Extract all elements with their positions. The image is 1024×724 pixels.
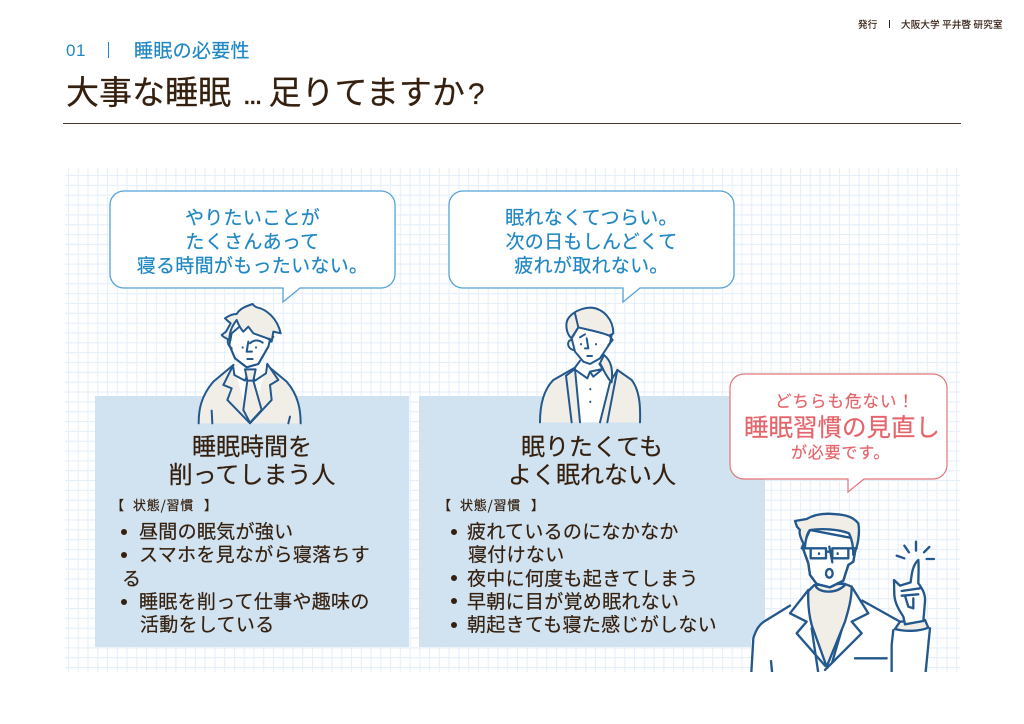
bullet bbox=[121, 529, 127, 535]
title: 大事な睡眠 ...足りてますか? bbox=[66, 66, 485, 114]
middle card label open bracket: 【 bbox=[438, 495, 452, 514]
middle card heading bbox=[508, 427, 676, 490]
list item wrap: 寝付けない bbox=[468, 540, 565, 567]
panel: left blue card bbox=[95, 396, 409, 647]
icon: professor pointing bbox=[751, 514, 934, 678]
publisher: laboratory: 大阪大学 平井啓 研究室 bbox=[901, 17, 1003, 31]
bubble: right bbox=[730, 374, 947, 492]
list item wrap: る bbox=[122, 564, 141, 591]
left card list bbox=[121, 517, 370, 637]
list item: 睡眠を削って仕事や趣味の bbox=[139, 587, 370, 614]
section number: 01 bbox=[66, 41, 86, 60]
list item: 夜中に何度も起きてしまう bbox=[467, 564, 699, 591]
left card label close bracket: 】 bbox=[204, 495, 218, 514]
list item: 早朝に目が覚め眠れない bbox=[467, 587, 679, 614]
icon: man with tie bbox=[199, 304, 301, 423]
bullet bbox=[121, 599, 127, 605]
right bubble heading: 睡眠習慣の見直し bbox=[744, 409, 940, 444]
panel: middle blue card bbox=[419, 396, 765, 647]
section label: 睡眠の必要性 bbox=[134, 36, 250, 63]
left card heading: 削ってしまう人 bbox=[169, 454, 335, 490]
left bubble text: やりたいことが bbox=[185, 203, 320, 230]
bullet bbox=[451, 575, 457, 581]
middle bubble text: 眠れなくてつらい。 bbox=[505, 203, 678, 230]
publisher: issued by: 発行 bbox=[858, 17, 877, 31]
list item: スマホを見ながら寝落ちす bbox=[139, 540, 370, 567]
left bubble text bbox=[137, 203, 368, 278]
middle card label: 状態/習慣 bbox=[460, 495, 521, 514]
middle card heading: 眠りたくても bbox=[521, 427, 663, 462]
publisher separator bbox=[889, 20, 890, 28]
list item: 朝起きても寝た感じがしない bbox=[467, 610, 717, 637]
bullet bbox=[451, 529, 457, 535]
middle card label close bracket: 】 bbox=[531, 495, 545, 514]
bullet bbox=[121, 552, 127, 558]
middle bubble text: 次の日もしんどくて bbox=[506, 227, 678, 254]
title rule bbox=[63, 123, 961, 124]
right bubble footer: が必要です。 bbox=[791, 439, 890, 463]
icon: woman with ponytail bbox=[540, 308, 640, 422]
left bubble text: 寝る時間がもったいない。 bbox=[137, 251, 368, 278]
list item: 疲れているのになかなか bbox=[467, 517, 679, 544]
left card label: 状態/習慣 bbox=[133, 495, 194, 514]
bubble: middle bbox=[449, 191, 734, 302]
section separator bbox=[108, 42, 109, 58]
left card heading bbox=[169, 427, 335, 490]
middle bubble text bbox=[505, 203, 678, 278]
left bubble text: たくさんあって bbox=[185, 227, 320, 254]
left card label open bracket: 【 bbox=[111, 495, 125, 514]
middle card heading: よく眠れない人 bbox=[508, 454, 676, 490]
bubble: left bbox=[110, 191, 395, 302]
middle bubble text: 疲れが取れない。 bbox=[514, 251, 669, 278]
list item wrap: 活動をしている bbox=[140, 610, 275, 637]
right bubble text: どちらも危ない！ bbox=[775, 388, 915, 412]
left card heading: 睡眠時間を bbox=[192, 427, 312, 462]
bullet bbox=[451, 598, 457, 604]
list item: 昼間の眠気が強い bbox=[139, 517, 293, 544]
middle card list bbox=[451, 517, 717, 637]
bullet bbox=[451, 622, 457, 628]
